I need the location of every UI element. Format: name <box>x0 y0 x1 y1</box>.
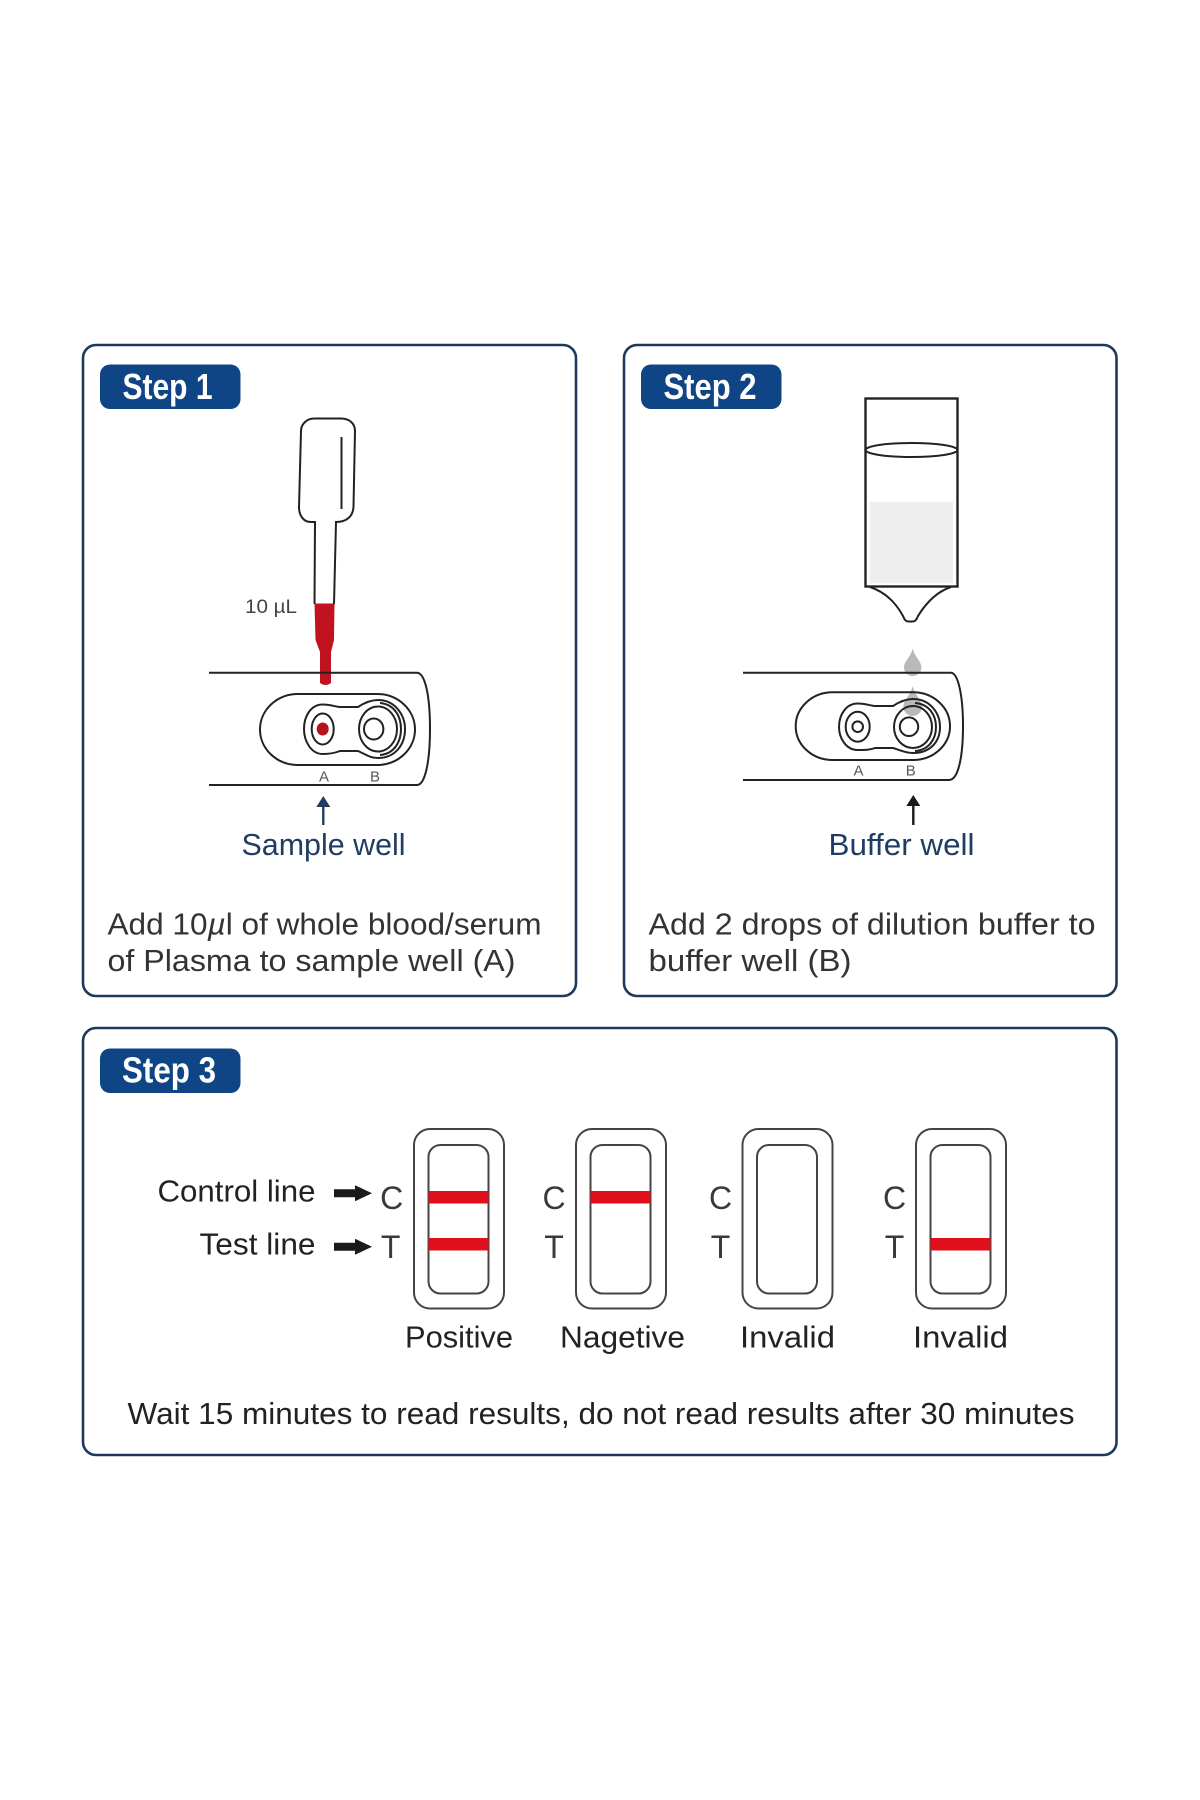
step 2 instruction <box>648 906 1096 978</box>
step 2 instruction: buffer well (B) <box>648 943 852 978</box>
sample well label: Sample well <box>242 827 406 862</box>
result strip: invalid, test line only <box>883 1129 1008 1355</box>
panel: step 2 <box>624 345 1116 996</box>
buffer well label: Buffer well <box>828 827 974 862</box>
icon: buffer drops <box>903 648 922 716</box>
test cassette: buffer well <box>743 673 963 780</box>
step 1 badge: Step 1 <box>122 366 212 407</box>
test line label: Test line <box>200 1226 316 1261</box>
result strip: invalid, no lines <box>709 1129 835 1355</box>
result strip: invalid, test line only: Invalid <box>913 1320 1008 1355</box>
result strip: negative: C <box>542 1180 566 1216</box>
test cassette: buffer well: A <box>853 763 864 780</box>
step 1 instruction <box>108 906 542 978</box>
step 1 instruction: Add 10µl of whole blood/serum <box>108 906 542 941</box>
result strip: positive <box>380 1129 513 1355</box>
step 3 badge: Step 3 <box>122 1050 216 1090</box>
result strip: invalid, no lines: Invalid <box>740 1320 835 1355</box>
icon: buffer tube <box>866 398 958 622</box>
step 2 badge: Step 2 <box>664 366 756 407</box>
step 3 instruction: Wait 15 minutes to read results, do not read results after 30 minutes <box>128 1396 1074 1431</box>
result strip: positive: T <box>381 1229 400 1265</box>
result strip: invalid, test line only: C <box>883 1180 906 1216</box>
result strip: positive: Positive <box>405 1320 513 1355</box>
step 2 instruction: Add 2 drops of dilution buffer to <box>648 906 1096 941</box>
result strip: invalid, no lines: T <box>711 1229 730 1265</box>
test line label <box>200 1226 372 1261</box>
step 1 instruction: of Plasma to sample well (A) <box>108 943 516 978</box>
test cassette: sample well <box>209 673 430 786</box>
result strip: invalid, no lines: C <box>709 1180 732 1216</box>
test cassette: sample well: B <box>370 769 380 786</box>
result strip: negative: T <box>544 1229 564 1265</box>
arrow to sample well <box>316 796 330 825</box>
arrow to buffer well <box>906 795 920 825</box>
volume label: 10 µL <box>245 597 297 618</box>
icon: pipette with blood <box>299 418 355 685</box>
panel: step 3 <box>83 1028 1116 1455</box>
test cassette: buffer well: B <box>906 763 916 780</box>
result strip: negative <box>542 1129 685 1355</box>
result strip: invalid, test line only: T <box>885 1229 904 1265</box>
result strip: negative: Nagetive <box>560 1320 685 1355</box>
test cassette: sample well: A <box>319 769 329 786</box>
control line label: Control line <box>158 1174 316 1209</box>
result strip: positive: C <box>380 1180 403 1216</box>
panel: step 1 <box>83 345 576 996</box>
